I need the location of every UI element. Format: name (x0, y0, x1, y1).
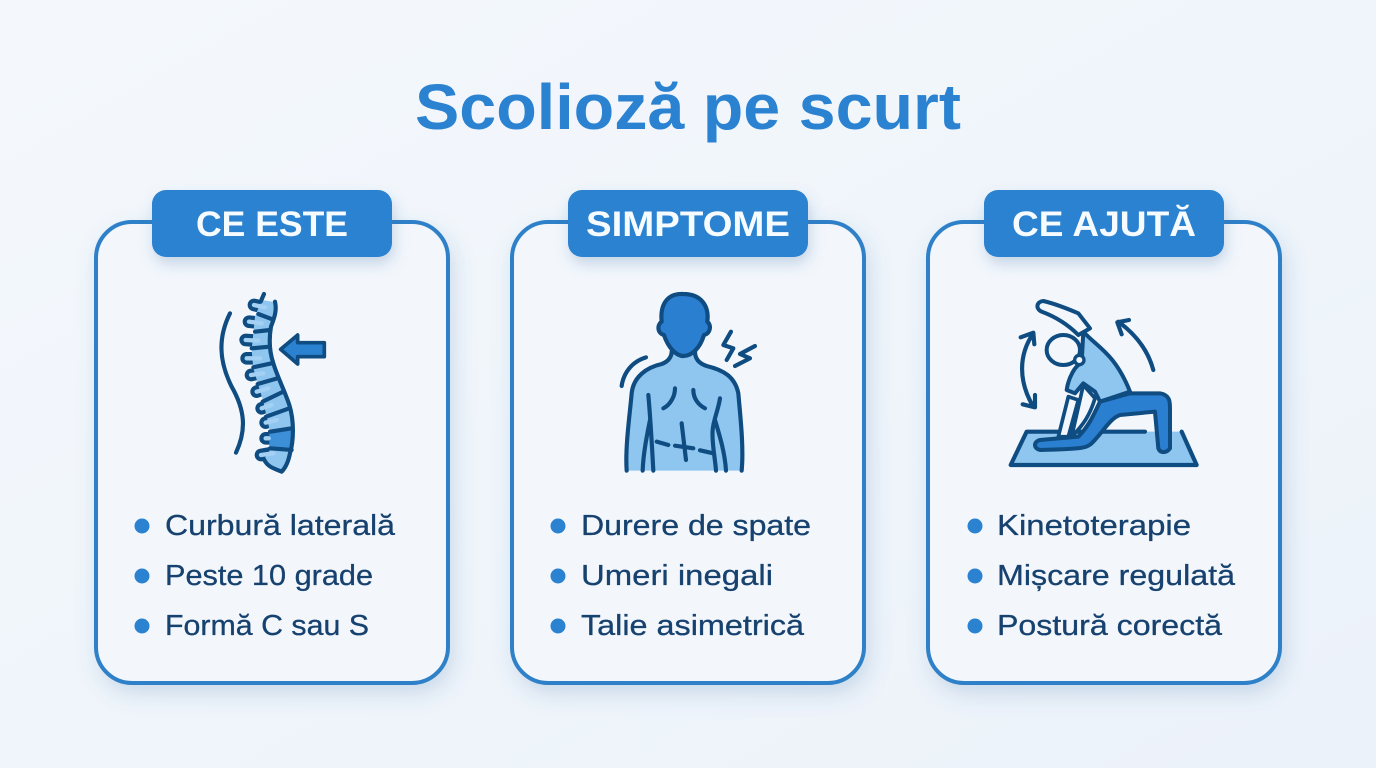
panel: ce ajuta (928, 190, 1280, 683)
panel: simptome (512, 190, 864, 683)
heading: ce este: CE ESTE (196, 205, 348, 244)
list: ce este: Formă C sau S (165, 610, 369, 642)
heading: simptome (568, 190, 808, 257)
panel: ce este (96, 190, 448, 683)
heading: ce este (152, 190, 392, 257)
icon: stretching on mat (1011, 301, 1197, 465)
list: simptome (550, 510, 811, 642)
list: ce este (134, 510, 395, 642)
heading: ce ajuta: CE AJUTĂ (1012, 205, 1196, 244)
list: ce ajuta: Mișcare regulată (997, 560, 1235, 592)
list: simptome: Durere de spate (581, 510, 811, 542)
heading: ce ajuta (984, 190, 1224, 257)
list: simptome: Umeri inegali (581, 560, 773, 592)
heading: simptome: SIMPTOME (586, 205, 790, 244)
card: ce este (96, 222, 448, 683)
list: ce ajuta: Kinetoterapie (997, 510, 1191, 542)
icon: back with pain (622, 294, 755, 471)
list: ce ajuta: Postură corectă (997, 610, 1222, 642)
list: ce este: Curbură laterală (165, 510, 395, 542)
list: ce ajuta (968, 510, 1235, 642)
list: ce este: Peste 10 grade (165, 560, 373, 592)
card: ce ajuta (928, 222, 1280, 683)
card: simptome (512, 222, 864, 683)
list: simptome: Talie asimetrică (581, 610, 804, 642)
title: Scolioză pe scurt (415, 71, 961, 143)
icon: spine with arrow (221, 294, 324, 472)
